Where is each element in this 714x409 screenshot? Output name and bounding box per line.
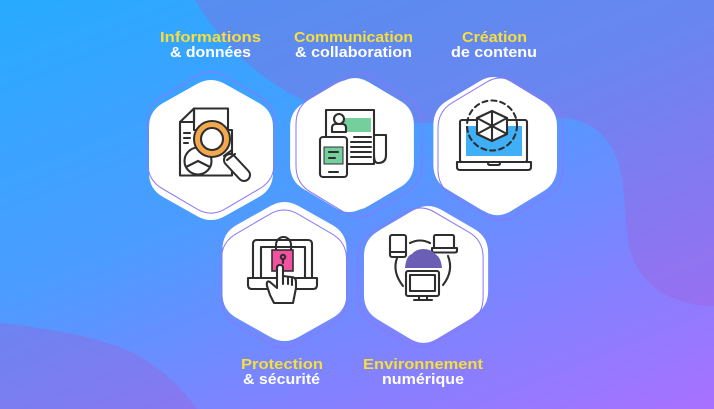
panel: environnement numérique: [358, 206, 488, 388]
title: communication: [294, 29, 413, 61]
hexagon: environnement: [358, 206, 488, 347]
panel: informations et données: [148, 29, 274, 220]
title: protection: Protection: [241, 356, 323, 373]
hexagon: protection: [222, 202, 346, 348]
title: informations: & données: [170, 44, 251, 61]
hexagon: informations: [148, 72, 274, 220]
title: communication: Communication: [294, 29, 413, 46]
title: environnement: numérique: [382, 371, 464, 388]
panel: communication et collaboration: [290, 29, 422, 217]
icon: newspaper and phone: [320, 110, 386, 177]
title: informations: Informations: [160, 29, 261, 46]
panel: création de contenu: [433, 29, 563, 220]
title: informations: [160, 29, 261, 61]
title: environnement: Environnement: [363, 356, 483, 373]
title: communication: & collaboration: [295, 44, 412, 61]
title: protection: [241, 356, 323, 388]
title: protection: & sécurité: [243, 371, 320, 388]
panel: protection et sécurité: [222, 202, 346, 388]
title: création: [451, 29, 537, 61]
icon: magnifier over documents: [180, 108, 244, 176]
hexagon: communication: [290, 73, 422, 217]
icon: laptop lock and hand: [248, 237, 317, 303]
icon: 3D cube on laptop: [457, 100, 531, 170]
hexagon: création: [433, 77, 563, 220]
title: environnement: [363, 356, 483, 388]
icon: connected devices: [390, 235, 457, 300]
title: création: Création: [462, 29, 527, 46]
title: création: de contenu: [451, 44, 537, 61]
